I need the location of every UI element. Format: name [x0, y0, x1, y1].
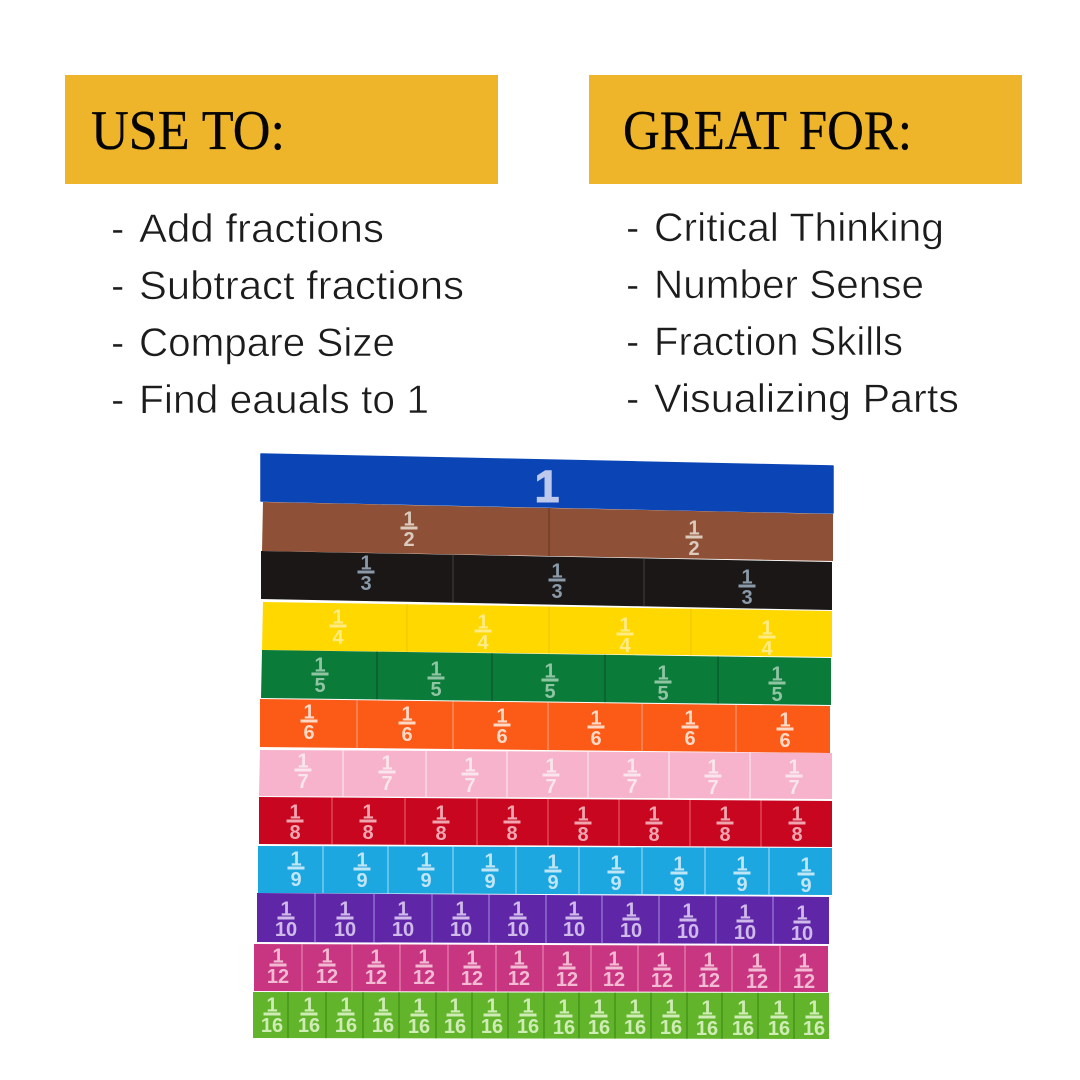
- text block: great for list: Fraction Skills: [654, 320, 903, 364]
- bar: twelfths: 1: [608, 948, 620, 970]
- bar: fifths: 1: [430, 658, 442, 680]
- bar: fifths: 5: [544, 681, 556, 703]
- text block: great for list: -: [626, 206, 639, 250]
- panel: great for heading: [589, 75, 1022, 184]
- bar: twelfths: 12: [316, 966, 338, 988]
- bar: thirds: 3: [741, 587, 753, 609]
- bar: sixteenths: 1: [629, 996, 641, 1018]
- bar: ninths: 9: [800, 875, 812, 897]
- bar: whole 1: [261, 454, 833, 513]
- bar: sevenths: 7: [381, 773, 393, 795]
- bar: twelfths: 12: [508, 968, 530, 990]
- bar: eighths: 1: [719, 804, 731, 826]
- bar: halves: 2: [403, 529, 415, 551]
- bar: sixteenths: 16: [517, 1016, 539, 1038]
- text block: great for list: [626, 206, 959, 421]
- bar: quarters: [262, 600, 832, 660]
- bar: thirds: 3: [360, 573, 372, 595]
- bar: fifths: 5: [771, 684, 783, 706]
- bar: tenths: 10: [734, 922, 756, 944]
- bar: quarters: 1: [619, 614, 631, 636]
- bar: sixteenths: 16: [444, 1016, 466, 1038]
- bar: tenths: 1: [568, 898, 580, 920]
- text block: great for list: -: [626, 320, 639, 364]
- bar: sixteenths: 16: [335, 1015, 357, 1037]
- bar: sixteenths: 1: [701, 998, 713, 1020]
- panel: great for heading: GREAT FOR:: [623, 100, 912, 162]
- bar: tenths: 10: [334, 919, 356, 941]
- bar: sixteenths: 16: [732, 1018, 754, 1040]
- text block: use to list: Compare Size: [139, 321, 395, 365]
- bar: twelfths: 12: [793, 971, 815, 993]
- bar: sevenths: 1: [545, 756, 557, 778]
- bar: sixteenths: 1: [266, 994, 278, 1016]
- text block: great for list: Number Sense: [654, 263, 924, 307]
- bar: sixteenths: [253, 992, 829, 1039]
- bar: fifths: 5: [430, 679, 442, 701]
- bar: sixteenths: 1: [665, 996, 677, 1018]
- bar: sixths: 1: [684, 708, 696, 730]
- bar: ninths: 1: [290, 848, 302, 870]
- bar: sevenths: 1: [707, 756, 719, 778]
- bar: ninths: 9: [420, 870, 432, 892]
- bar: sixths: 6: [401, 724, 413, 746]
- bar: sevenths: 1: [464, 754, 476, 776]
- bar: ninths: 9: [673, 874, 685, 896]
- bar: whole 1: 1: [534, 461, 560, 512]
- fraction tiles stack: [253, 454, 833, 1042]
- text block: great for list: Visualizing Parts: [654, 377, 959, 421]
- text block: use to list: -: [111, 207, 124, 251]
- bar: eighths: 8: [435, 823, 447, 845]
- bar: twelfths: 12: [603, 969, 625, 991]
- bar: fifths: 1: [771, 664, 783, 686]
- bar: sixteenths: 1: [377, 994, 389, 1016]
- bar: sixths: 6: [303, 722, 315, 744]
- bar: quarters: 4: [619, 635, 631, 657]
- bar: eighths: 8: [362, 822, 374, 844]
- bar: eighths: 8: [506, 823, 518, 845]
- bar: ninths: 9: [484, 871, 496, 893]
- bar: twelfths: 1: [751, 950, 763, 972]
- bar: sixteenths: 1: [773, 998, 785, 1020]
- bar: eighths: 1: [435, 802, 447, 824]
- bar: sixteenths: 1: [737, 998, 749, 1020]
- bar: fifths: 1: [657, 662, 669, 684]
- bar: tenths: 1: [339, 898, 351, 920]
- bar: sixths: 6: [684, 728, 696, 750]
- bar: tenths: 10: [620, 920, 642, 942]
- bar: halves: 2: [688, 538, 700, 560]
- bar: quarters: 4: [477, 632, 489, 654]
- bar: sixths: 1: [401, 704, 413, 726]
- bar: sixteenths: 16: [696, 1018, 718, 1040]
- bar: tenths: 10: [450, 919, 472, 941]
- bar: tenths: 10: [677, 921, 699, 943]
- bar: thirds: 1: [551, 560, 563, 582]
- bar: twelfths: 1: [561, 948, 573, 970]
- bar: sixteenths: 1: [486, 996, 498, 1018]
- bar: eighths: 8: [648, 824, 660, 846]
- bar: sixths: 6: [496, 726, 508, 748]
- text block: use to list: Subtract fractions: [139, 264, 464, 308]
- bar: ninths: 1: [484, 850, 496, 872]
- bar: twelfths: 12: [413, 967, 435, 989]
- bar: twelfths: 1: [656, 950, 668, 972]
- bar: sixteenths: 16: [261, 1015, 283, 1037]
- bar: fifths: 1: [544, 660, 556, 682]
- bar: twelfths: 1: [466, 948, 478, 970]
- bar: sixteenths: 16: [588, 1017, 610, 1039]
- bar: twelfths: 12: [365, 967, 387, 989]
- bar: sixteenths: 16: [660, 1017, 682, 1039]
- bar: sixteenths: 1: [558, 996, 570, 1018]
- bar: sixteenths: 16: [481, 1016, 503, 1038]
- bar: ninths: 9: [356, 870, 368, 892]
- bar: ninths: 1: [420, 850, 432, 872]
- bar: fifths: [261, 648, 831, 708]
- text block: great for list: -: [626, 263, 639, 307]
- bar: sixths: 1: [496, 706, 508, 728]
- bar: fifths: 5: [657, 683, 669, 705]
- bar: sevenths: 7: [297, 771, 309, 793]
- bar: sevenths: 1: [381, 752, 393, 774]
- bar: sixths: 1: [779, 710, 791, 732]
- bar: sixteenths: 16: [624, 1017, 646, 1039]
- bar: ninths: 1: [673, 854, 685, 876]
- bar: thirds: 1: [360, 552, 372, 574]
- bar: tenths: 1: [280, 898, 292, 920]
- bar: sixths: 1: [303, 702, 315, 724]
- bar: twelfths: 1: [272, 946, 284, 968]
- bar: sixteenths: 1: [593, 996, 605, 1018]
- bar: eighths: 8: [577, 824, 589, 846]
- bar: tenths: [257, 893, 829, 944]
- bar: eighths: 1: [648, 804, 660, 826]
- bar: twelfths: 12: [698, 970, 720, 992]
- bar: eighths: 1: [791, 804, 803, 826]
- bar: sixteenths: 1: [449, 996, 461, 1018]
- bar: sixteenths: 1: [522, 996, 534, 1018]
- bar: sixteenths: 16: [553, 1017, 575, 1039]
- bar: thirds: 1: [741, 566, 753, 588]
- bar: tenths: 10: [791, 923, 813, 945]
- bar: sevenths: 7: [545, 776, 557, 798]
- bar: sixths: 6: [590, 728, 602, 750]
- text block: use to list: -: [111, 378, 124, 422]
- bar: twelfths: [254, 944, 828, 992]
- bar: sevenths: 7: [626, 776, 638, 798]
- bar: sixths: [260, 699, 830, 753]
- bar: quarters: 4: [761, 638, 773, 660]
- bar: tenths: 10: [275, 919, 297, 941]
- bar: twelfths: 1: [798, 950, 810, 972]
- text block: use to list: Find eauals to 1: [139, 378, 429, 422]
- bar: halves: 1: [688, 518, 700, 540]
- bar: sevenths: 1: [297, 750, 309, 772]
- bar: sevenths: 7: [707, 777, 719, 799]
- bar: sixths: 1: [590, 708, 602, 730]
- bar: sixteenths: 16: [298, 1015, 320, 1037]
- bar: eighths: 8: [719, 824, 731, 846]
- bar: twelfths: 12: [556, 969, 578, 991]
- bar: sevenths: [259, 750, 832, 799]
- bar: tenths: 10: [563, 919, 585, 941]
- bar: twelfths: 1: [513, 948, 525, 970]
- panel: use to heading: [65, 75, 498, 184]
- bar: tenths: 1: [739, 902, 751, 924]
- text block: great for list: -: [626, 377, 639, 421]
- bar: halves: [262, 500, 833, 565]
- bar: tenths: 1: [397, 898, 409, 920]
- bar: tenths: 1: [455, 898, 467, 920]
- bar: thirds: [261, 551, 832, 610]
- bar: quarters: 4: [332, 627, 344, 649]
- bar: eighths: 1: [289, 802, 301, 824]
- bar: tenths: 10: [392, 919, 414, 941]
- bar: tenths: 1: [682, 900, 694, 922]
- bar: eighths: [259, 797, 832, 847]
- bar: thirds: 3: [551, 581, 563, 603]
- text block: use to list: Add fractions: [139, 207, 384, 251]
- bar: twelfths: 12: [267, 966, 289, 988]
- bar: eighths: 1: [577, 804, 589, 826]
- bar: quarters: 1: [332, 606, 344, 628]
- bar: tenths: 1: [796, 902, 808, 924]
- bar: fifths: 5: [314, 675, 326, 697]
- bar: ninths: 1: [610, 852, 622, 874]
- bar: fifths: 1: [314, 654, 326, 676]
- bar: twelfths: 12: [746, 971, 768, 993]
- bar: eighths: 8: [791, 824, 803, 846]
- text block: use to list: -: [111, 321, 124, 365]
- bar: ninths: 9: [736, 874, 748, 896]
- bar: ninths: [258, 846, 832, 895]
- bar: ninths: 1: [736, 854, 748, 876]
- bar: sevenths: 1: [626, 756, 638, 778]
- panel: use to heading: USE TO:: [91, 100, 285, 162]
- bar: quarters: 1: [761, 618, 773, 640]
- bar: twelfths: 1: [418, 946, 430, 968]
- bar: tenths: 10: [507, 919, 529, 941]
- bar: sixteenths: 1: [303, 994, 315, 1016]
- bar: sixteenths: 1: [808, 998, 820, 1020]
- bar: ninths: 9: [610, 873, 622, 895]
- bar: sevenths: 7: [464, 775, 476, 797]
- bar: quarters: 1: [477, 612, 489, 634]
- text block: great for list: Critical Thinking: [654, 206, 944, 250]
- text block: use to list: -: [111, 264, 124, 308]
- bar: halves: 1: [403, 508, 415, 530]
- bar: twelfths: 12: [461, 968, 483, 990]
- bar: sevenths: 1: [788, 756, 800, 778]
- bar: tenths: 1: [512, 898, 524, 920]
- bar: sixteenths: 16: [768, 1018, 790, 1040]
- bar: eighths: 8: [289, 822, 301, 844]
- bar: eighths: 1: [362, 802, 374, 824]
- bar: twelfths: 12: [651, 970, 673, 992]
- bar: tenths: 1: [625, 900, 637, 922]
- bar: sixteenths: 1: [340, 994, 352, 1016]
- bar: sevenths: 7: [788, 777, 800, 799]
- bar: twelfths: 1: [703, 950, 715, 972]
- bar: ninths: 1: [800, 854, 812, 876]
- bar: twelfths: 1: [321, 946, 333, 968]
- bar: sixteenths: 16: [803, 1018, 825, 1040]
- bar: eighths: 1: [506, 802, 518, 824]
- bar: sixteenths: 16: [372, 1015, 394, 1037]
- bar: sixteenths: 16: [408, 1016, 430, 1038]
- bar: ninths: 9: [290, 869, 302, 891]
- bar: ninths: 1: [356, 850, 368, 872]
- bar: ninths: 9: [547, 872, 559, 894]
- bar: twelfths: 1: [370, 946, 382, 968]
- bar: ninths: 1: [547, 852, 559, 874]
- text block: use to list: [111, 207, 464, 422]
- bar: sixths: 6: [779, 730, 791, 752]
- bar: sixteenths: 1: [413, 996, 425, 1018]
